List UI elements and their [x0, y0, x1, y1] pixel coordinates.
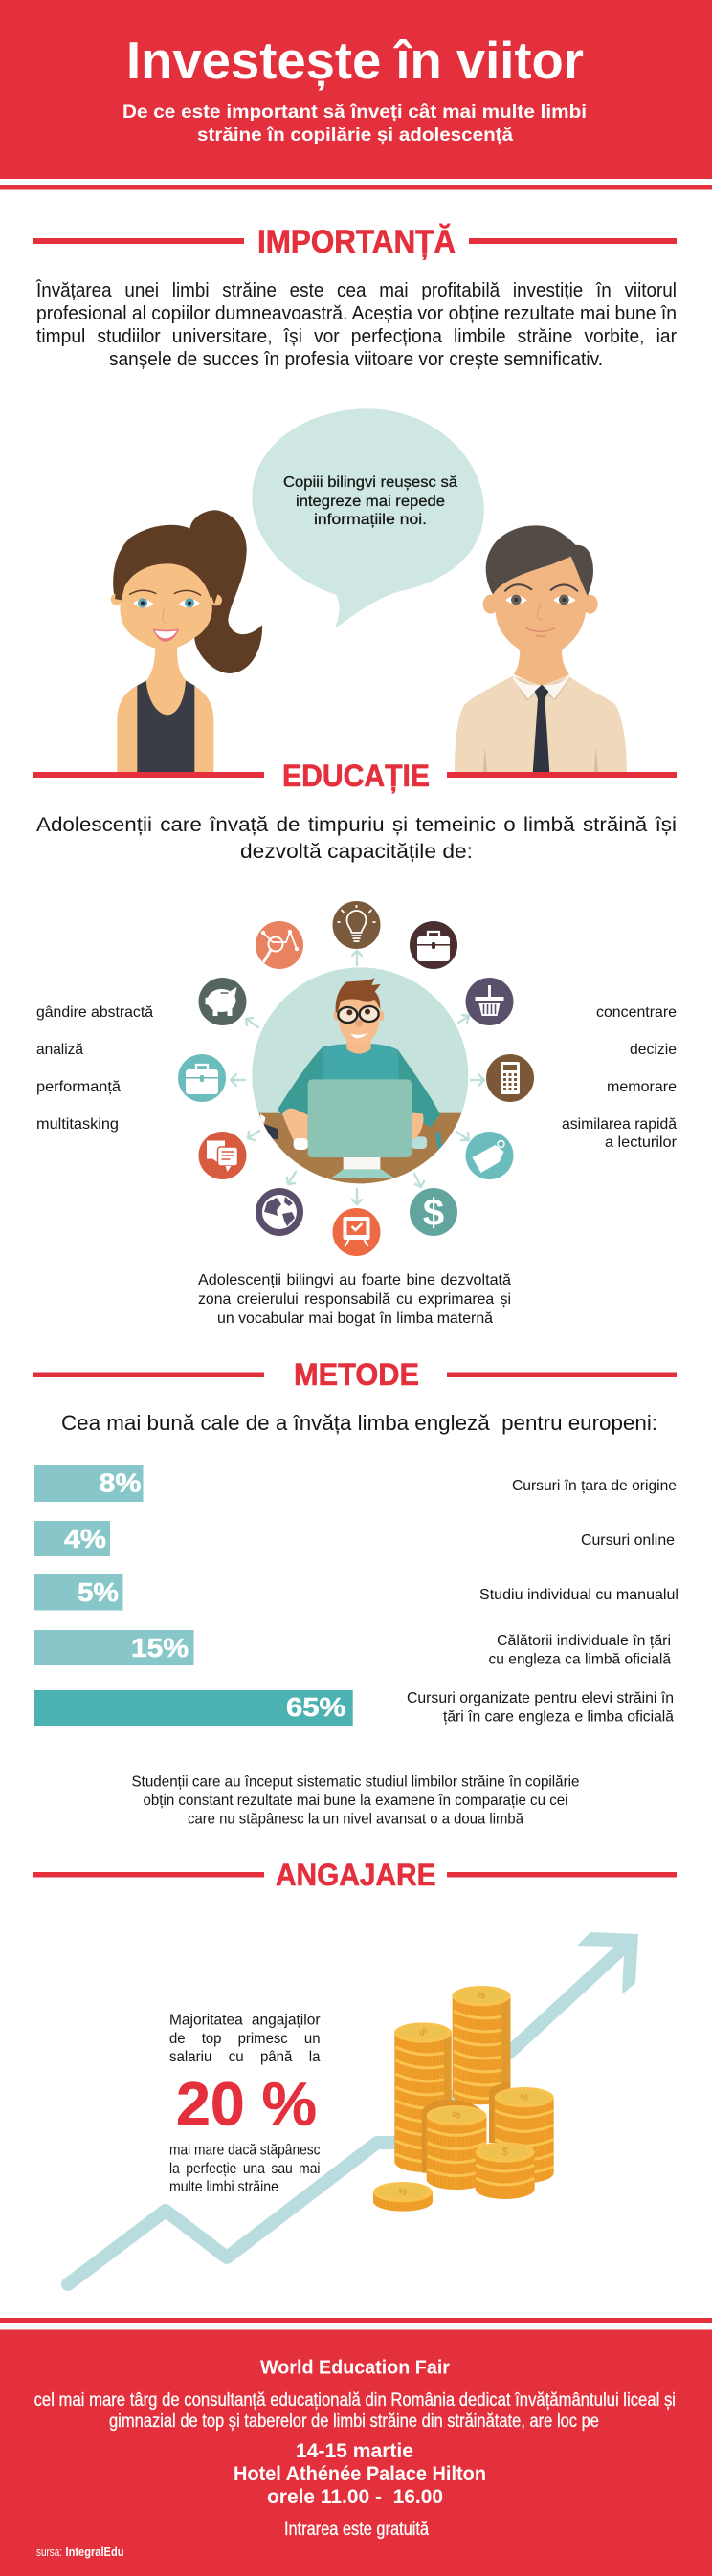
bar: 65%	[34, 1690, 674, 1726]
event details	[234, 2440, 486, 2508]
bar chart	[34, 1465, 679, 1726]
icon: chart and magnifier	[256, 921, 303, 969]
header banner	[0, 0, 712, 189]
illustration: woman	[111, 510, 262, 773]
left skill labels: gândire abstractă	[36, 1004, 153, 1021]
illustration: man	[455, 525, 627, 773]
small coin stack: $	[501, 2146, 508, 2159]
icon: globe	[256, 1188, 303, 1236]
bar: 4%: Cursuri online	[581, 1532, 675, 1549]
bar: 4%	[34, 1521, 675, 1556]
icon: presentation	[333, 1208, 381, 1256]
tall coin stack	[394, 2022, 452, 2172]
illustration: coin stacks	[373, 1986, 554, 2212]
text block: salary: multe limbi străine	[169, 2179, 278, 2195]
event details: orele 11.00 - 16.00	[267, 2486, 443, 2508]
right skill labels: decizie	[630, 1042, 677, 1058]
bar: 8%: Cursuri în țara de origine	[512, 1478, 677, 1494]
bar: 65%: 65%	[286, 1692, 345, 1722]
heading: angajare: ANGAJARE	[276, 1858, 436, 1892]
speech bubble: Copiii bilingvi reușesc să	[283, 474, 457, 491]
text block: salary: Majoritatea angajaților	[169, 2013, 321, 2029]
text block: salary: mai mare dacă stăpânesc	[169, 2143, 320, 2159]
text block: importance paragraph	[35, 279, 677, 370]
heading: metode	[33, 1357, 677, 1392]
icon: dark briefcase	[410, 921, 457, 969]
source: sursa:	[36, 2545, 62, 2559]
source	[36, 2545, 124, 2559]
heading: angajare	[33, 1858, 677, 1892]
bar: 8%: 8%	[100, 1467, 142, 1498]
right coin stack: $	[517, 2090, 532, 2103]
left skill labels: performanță	[36, 1079, 121, 1095]
subtitle	[122, 102, 587, 145]
bar: 15%: cu engleza ca limbă oficială	[488, 1651, 671, 1668]
back coin stack: $	[474, 1989, 489, 2001]
subtitle: străine în copilărie și adolescență	[197, 125, 513, 145]
event description	[34, 2390, 676, 2432]
text block: bilingual teens: zona creierului responsabilă cu exprimarea și	[198, 1291, 511, 1308]
arrows around circle	[231, 951, 484, 1204]
heading: educație	[33, 759, 677, 793]
bar: 4%: 4%	[64, 1524, 106, 1553]
text block: students: Studenții care au început sistematic studiul limbilor străine în copilărie	[132, 1774, 580, 1791]
right skill labels	[562, 1004, 678, 1151]
bar: 65%: țări în care engleza e limba oficială	[443, 1708, 674, 1726]
event name: World Education Fair	[260, 2358, 450, 2379]
text block: students: care nu stăpânesc la un nivel avansat o a doua limbă	[188, 1812, 523, 1828]
right coin stack	[495, 2087, 554, 2183]
single coin: $	[395, 2185, 411, 2197]
right skill labels: concentrare	[596, 1004, 677, 1021]
heading: importanță	[33, 224, 677, 260]
icon: calculator	[486, 1054, 534, 1102]
icon: basket	[465, 978, 513, 1025]
text block: importance paragraph: sanșele de succes în profesia viitoare vor crește semnificativ.	[109, 349, 603, 370]
left skill labels: multitasking	[36, 1116, 119, 1133]
left skill labels: analiză	[36, 1042, 83, 1058]
text block: importance paragraph: Învățarea unei limbi străine este cea mai profitabilă investiție în viitorul	[35, 279, 677, 301]
speech bubble: integreze mai repede	[296, 494, 445, 510]
text block: students	[132, 1774, 580, 1828]
text block: salary: salariu cu până la	[169, 2049, 321, 2065]
text block: bilingual teens: Adolescenții bilingvi au foarte bine dezvoltată	[198, 1272, 511, 1288]
text block: salary: de top primesc un	[169, 2031, 320, 2047]
left skill labels	[36, 1004, 153, 1133]
right skill labels: asimilarea rapidă	[562, 1116, 677, 1133]
text block: salary: la perfecție una sau mai	[169, 2161, 320, 2177]
illustration: person at computer	[249, 967, 478, 1186]
text block: students: obțin constant rezultate mai bune la examene în comparație cu cei	[144, 1793, 568, 1809]
text block: importance paragraph: timpul studiilor universitare, își vor perfecționa limbile străine vorbite, iar	[36, 326, 677, 347]
footer panel	[0, 2318, 712, 2576]
heading: importanță: IMPORTANȚĂ	[257, 224, 456, 260]
event details: Hotel Athénée Palace Hilton	[234, 2463, 486, 2485]
text block: bilingual teens	[198, 1272, 511, 1327]
back coin stack	[452, 1986, 511, 2104]
bar: 15%: Călătorii individuale în țări	[497, 1633, 671, 1649]
icon: price tag	[465, 1132, 513, 1179]
tall coin stack: $	[415, 2026, 431, 2038]
heading: educație: EDUCAȚIE	[282, 759, 430, 793]
icon: chat bubbles	[199, 1132, 247, 1179]
right skill labels: a lecturilor	[605, 1134, 678, 1151]
chart title: Cea mai bună cale de a învăța limba engleză pentru europeni:	[61, 1411, 657, 1435]
title: Investește în viitor	[126, 31, 584, 91]
bar: 5%: 5%	[78, 1577, 119, 1607]
bar: 15%: 15%	[131, 1633, 189, 1662]
event description: gimnazial de top și taberelor de limbi străine din străinătate, are loc pe	[109, 2411, 599, 2432]
subtitle: De ce este important să înveți cât mai multe limbi	[122, 102, 587, 122]
right skill labels: memorare	[607, 1079, 677, 1095]
rising arrow	[68, 1932, 638, 2284]
heading: metode: METODE	[294, 1357, 419, 1392]
speech bubble: informațiile noi.	[314, 512, 427, 528]
front coin stack	[427, 2105, 486, 2190]
bar: 15%	[34, 1630, 671, 1668]
icon: dollar	[410, 1188, 457, 1236]
statistic: 20%: 20 %	[176, 2070, 317, 2139]
bar: 5%: Studiu individual cu manualul	[479, 1587, 679, 1603]
event details: 14-15 martie	[296, 2440, 413, 2462]
bar: 5%	[34, 1574, 679, 1611]
small coin stack	[476, 2142, 535, 2199]
text block: importance paragraph: profesional al copiilor dumneavoastră. Aceștia vor obține rezultate mai bune în	[36, 303, 677, 324]
speech bubble	[252, 408, 484, 628]
text block: education intro: dezvoltă capacitățile de:	[240, 840, 473, 863]
text block: education intro	[36, 813, 677, 863]
source: IntegralEdu	[65, 2545, 124, 2559]
single coin	[373, 2182, 433, 2212]
icon: piggy bank	[199, 978, 247, 1025]
bar: 8%	[34, 1465, 677, 1502]
text block: education intro: Adolescenții care învață de timpuriu și temeinic o limbă străină își	[36, 813, 677, 836]
free entry: Intrarea este gratuită	[284, 2520, 429, 2540]
bar: 65%: Cursuri organizate pentru elevi străini în	[407, 1690, 674, 1706]
front coin stack: $	[449, 2108, 464, 2121]
text block: salary	[169, 2013, 321, 2195]
icon: dollar: $	[423, 1192, 444, 1234]
icon: light bulb	[333, 901, 381, 949]
icon: teal briefcase	[178, 1054, 226, 1102]
text block: bilingual teens: un vocabular mai bogat în limba maternă	[217, 1310, 493, 1327]
